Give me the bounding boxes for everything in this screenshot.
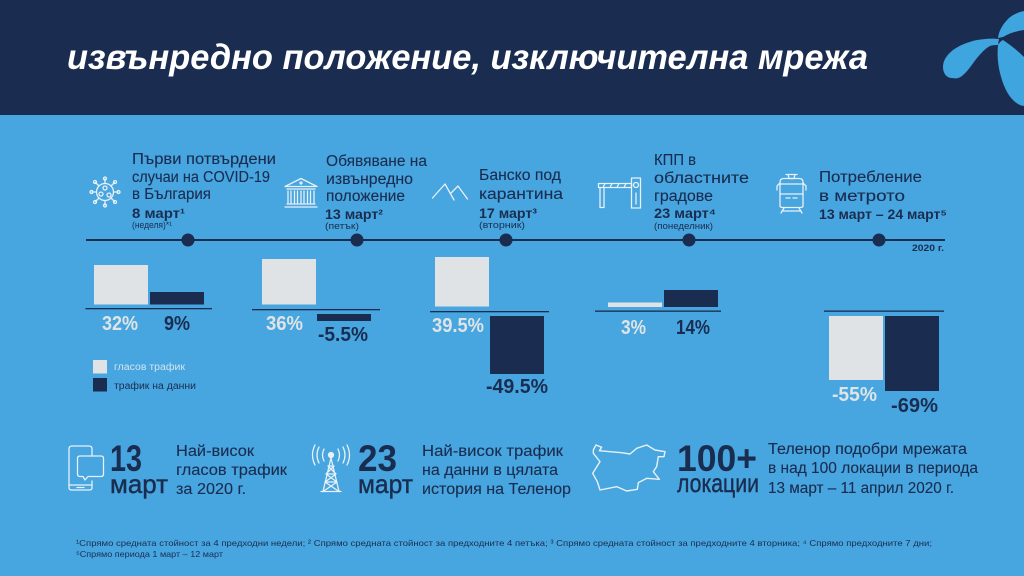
stat description [422, 443, 571, 498]
bar chart: 17 March [430, 257, 549, 398]
event text: градове [654, 188, 713, 205]
event text: в метрото [819, 188, 905, 205]
stat description: Най-висок трафик [422, 443, 563, 460]
header band [0, 0, 1024, 115]
footnotes: ⁵Спрямо периода 1 март – 12 март [76, 549, 223, 559]
event text: областните [654, 170, 749, 187]
event text: (вторник) [479, 220, 525, 230]
icon: map of Bulgaria [593, 445, 665, 491]
stat description: в над 100 локации в периода [768, 460, 978, 477]
event: Bansko quarantine [432, 167, 563, 230]
bar chart: 13 March: 36% [266, 313, 303, 335]
stat description: на данни в цялата [422, 462, 558, 479]
event text: в България [132, 186, 211, 203]
bar chart: 8 March [86, 265, 212, 335]
event text: (петък) [325, 221, 359, 231]
event text [654, 152, 749, 231]
stat: 23 March data traffic [312, 438, 571, 499]
legend: гласов трафик [114, 361, 186, 373]
event text [819, 169, 947, 222]
bar chart: 23 March: 14% [676, 317, 710, 339]
event text: Обявяване на [326, 153, 427, 170]
event text [132, 151, 276, 230]
bar chart: 23 March: 3% [621, 317, 646, 339]
icon: metro train [777, 174, 806, 213]
bar chart: 17 March: -49.5% [486, 376, 548, 398]
icon: phone with speech bubble [69, 446, 104, 490]
event text: 13 март – 24 март⁵ [819, 206, 947, 222]
event: checkpoints [598, 152, 749, 231]
event text: карантина [479, 186, 563, 203]
title: извънредно положение, изключителна мрежа [67, 38, 868, 77]
stat unit: локации [677, 468, 759, 498]
legend: трафик на данни [114, 380, 196, 392]
stat description: гласов трафик [176, 462, 287, 479]
event text: 13 март² [325, 206, 383, 222]
stat description [176, 443, 287, 498]
event text [325, 153, 427, 231]
event text: 17 март³ [479, 205, 537, 221]
event text: случаи на COVID-19 [132, 169, 270, 186]
bar chart: 13 March [252, 259, 380, 346]
stat description: Теленор подобри мрежата [768, 441, 967, 458]
icon: signal tower [312, 445, 350, 492]
stat description: 13 март – 11 април 2020 г. [768, 480, 954, 497]
event text: КПП в [654, 152, 696, 169]
event text: (неделя)*¹ [132, 220, 172, 230]
event text: положение [326, 188, 405, 205]
icon: mountains [432, 184, 468, 200]
event: first COVID-19 cases [90, 151, 276, 230]
event text: 23 март⁴ [654, 205, 716, 221]
stat description: Най-висок [176, 443, 254, 460]
event: state of emergency [285, 153, 427, 231]
timeline year: 2020 г. [912, 243, 944, 254]
event text: 8 март¹ [132, 205, 185, 221]
icon: Telenor logo [943, 11, 1024, 106]
event text: Първи потвърдени [132, 151, 276, 168]
event text: извънредно [326, 171, 413, 188]
bar chart: 17 March: 39.5% [432, 315, 484, 337]
stat unit: март [110, 469, 168, 499]
bar chart: metro [824, 310, 944, 417]
stat: 100+ locations [593, 438, 978, 498]
bar chart: 8 March: 32% [102, 313, 138, 335]
stat description: история на Теленор [422, 481, 571, 498]
stat number: 100+ [677, 438, 757, 479]
icon: road barrier [598, 178, 640, 208]
bar chart: 23 March [595, 290, 721, 339]
stat number: 23 [358, 438, 397, 479]
bar chart: metro: -55% [832, 384, 877, 406]
bar chart: metro: -69% [891, 395, 938, 417]
bar chart: 8 March: 9% [164, 313, 190, 335]
event text: Потребление [819, 169, 922, 186]
icon: institution building [285, 178, 317, 207]
event text [479, 167, 563, 230]
footnotes: ¹Спрямо средната стойност за 4 предходни недели; ² Спрямо средната стойност за предходните 4 петъка; ³ Спрямо средната стойност за предходните 4 вторника; ⁴ Спрямо предходните 7 дни; [76, 538, 932, 548]
event text: Банско под [479, 167, 561, 184]
footnotes [76, 538, 932, 559]
stat unit: март [358, 469, 413, 499]
stat number: 13 [110, 438, 142, 479]
event: metro usage [777, 169, 947, 222]
timeline [86, 234, 945, 254]
stat description [768, 441, 978, 497]
stat description: за 2020 г. [176, 481, 246, 498]
bar chart: 13 March: -5.5% [318, 324, 368, 346]
stat: 13 March voice traffic [69, 438, 287, 499]
event text: (понеделник) [654, 221, 713, 231]
legend [93, 360, 196, 392]
icon: virus [90, 177, 120, 207]
